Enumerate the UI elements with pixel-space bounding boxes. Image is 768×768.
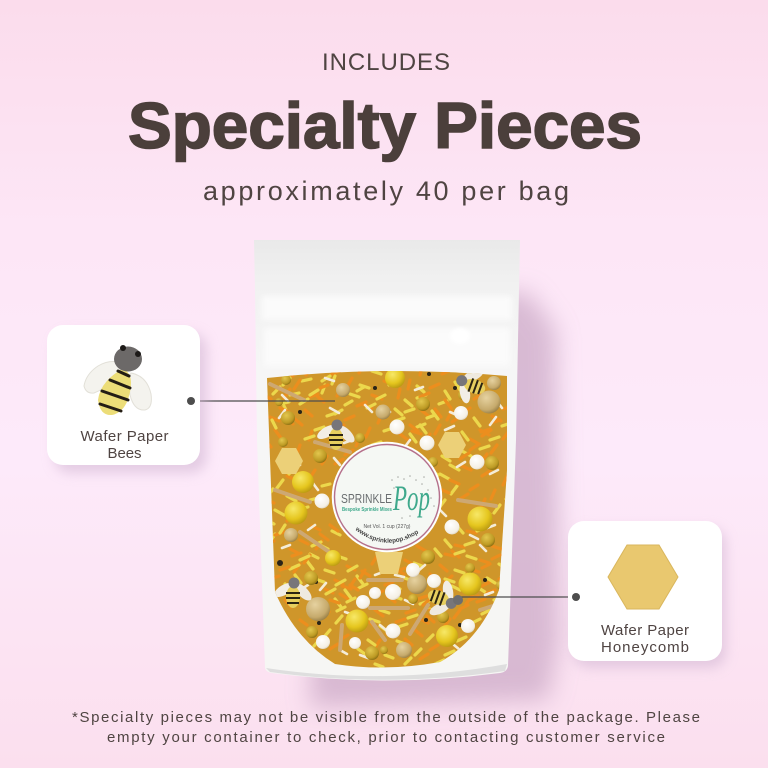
gold rods: [270, 384, 496, 650]
card: wafer paper bees: [47, 325, 200, 465]
brand label: www.sprinklepop.shop: [356, 527, 418, 544]
brand name: SPRINKLE: [341, 492, 392, 506]
tagline: Bespoke Sprinkle Mixes: [342, 507, 392, 513]
card label: Wafer Paper: [80, 428, 168, 445]
icon: honeycomb: [608, 545, 678, 609]
brand label: [332, 442, 442, 552]
pouch body: [254, 240, 520, 680]
sprinkles: white pieces: [279, 378, 502, 658]
card label: Wafer Paper: [601, 622, 689, 639]
subtitle: approximately 40 per bag: [203, 176, 569, 206]
card background: [47, 325, 200, 465]
card: wafer paper honeycomb: Honeycomb: [601, 639, 689, 656]
tan pearls: [284, 376, 501, 658]
title: Specialty Pieces: [128, 89, 642, 162]
callout line: honeycomb: [453, 595, 576, 605]
card: wafer paper honeycomb: [568, 521, 722, 661]
connector dot: [572, 593, 580, 601]
footnote: empty your container to check, prior to contacting customer service: [107, 729, 665, 746]
dark specks: [277, 372, 487, 627]
sprinkles: top layer: [272, 376, 500, 658]
label disc: [332, 442, 442, 552]
connector dot: [187, 397, 195, 405]
footnote: *Specialty pieces may not be visible from the outside of the package. Please: [72, 709, 700, 726]
pouch shadow: [310, 292, 560, 708]
card background: [568, 521, 722, 661]
callout line: bees: [191, 400, 335, 402]
card: wafer paper bees: Bees: [108, 445, 142, 462]
website: [352, 527, 426, 543]
card shadow: bees: [54, 333, 207, 473]
sprinkle window: [267, 371, 507, 668]
product pouch: [254, 240, 520, 680]
icon: bee: [84, 345, 151, 415]
white pearls: [314, 406, 484, 649]
speckles: [391, 475, 435, 519]
net weight: Net Vol. 1 cup (227g): [364, 524, 411, 530]
heading: includes: INCLUDES: [322, 49, 450, 76]
honeycomb pieces: [275, 432, 466, 574]
pouch lower fold: [266, 664, 507, 680]
card shadow: honeycomb: [573, 528, 726, 668]
brand script: Pop: [392, 478, 430, 518]
footnote: [72, 709, 700, 746]
sprinkles: under layers: [284, 362, 512, 644]
mini bees: [275, 373, 486, 616]
yellow pearls: [284, 368, 492, 647]
pouch highlights: [262, 296, 512, 366]
gold pearls: [275, 375, 504, 660]
